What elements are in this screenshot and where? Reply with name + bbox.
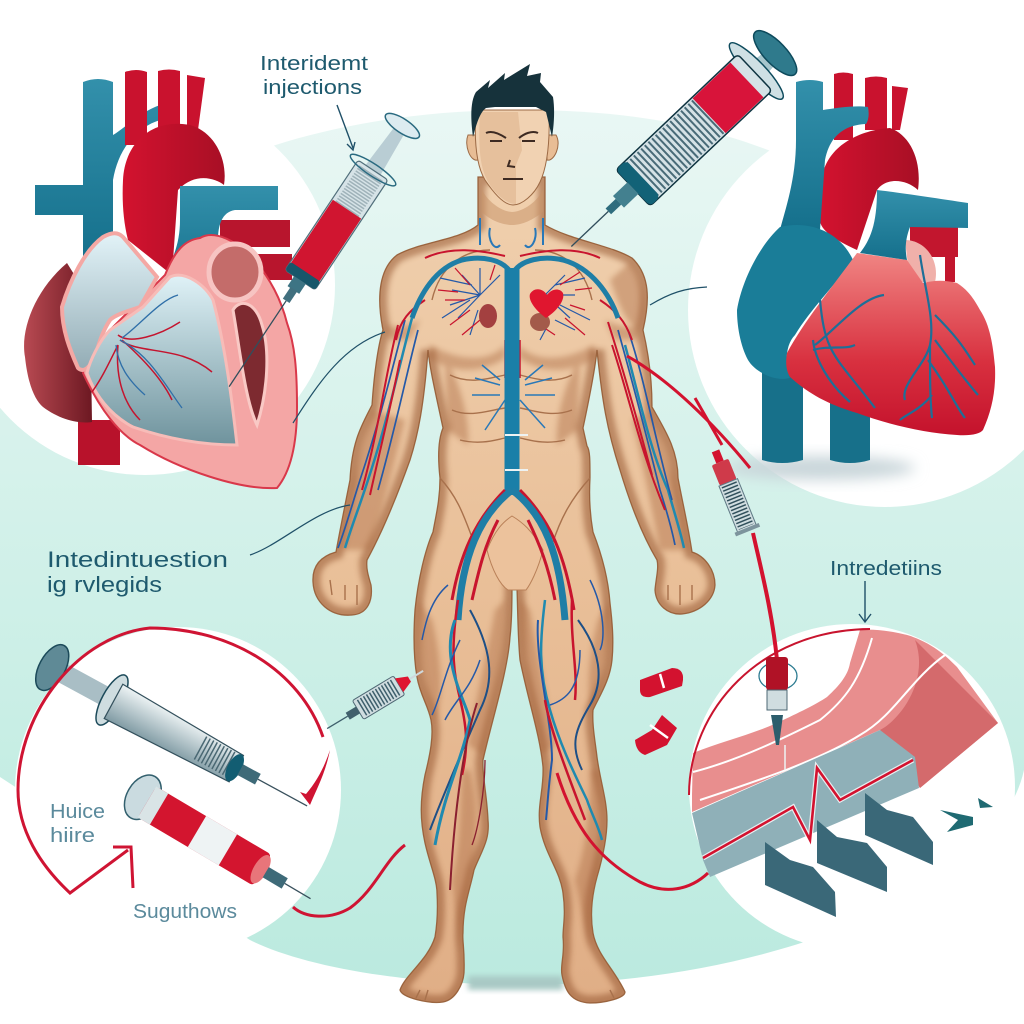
lung trees [438,265,592,430]
heart: cross-section top left [24,70,297,488]
label: left middle line two: ig rvlegids [47,572,162,597]
main chamber [87,275,237,445]
ground shadow [468,976,563,990]
label: hiire: hiire [50,825,95,847]
panel: bottom left circle [15,627,341,953]
panel: top left circle [0,95,335,475]
tube: leg to bottom right [557,773,708,889]
groin bifurcation red [452,490,574,610]
band lines [693,638,945,800]
curve to thigh [293,845,405,916]
syringe: top right [545,18,809,274]
valve ring [209,244,261,300]
upper red vessels [396,250,632,340]
label: suguthows: Suguthows [133,901,237,923]
right pec dark spot [530,313,550,331]
hair [471,64,554,137]
heart: exterior top right [725,72,995,480]
grey block [692,730,919,877]
right leg vessels [538,580,603,840]
heart vessels [813,255,978,420]
syringe: bottom left lower [117,768,324,918]
muscle lines [330,250,692,1000]
panel: bottom right circle [689,624,1015,950]
ears [467,135,558,160]
connector lines [250,287,707,555]
dark block two [817,820,887,892]
pills [635,668,683,755]
red arc: bottom right circle [689,629,870,795]
dark block three [865,793,933,865]
arrow: lower right [859,581,871,622]
groin bifurcation blue [458,490,565,620]
left leg vessels [422,585,489,890]
limb shading [340,262,690,950]
body [313,177,715,1003]
face shade [479,112,522,204]
human figure [313,64,715,1003]
syringe: top left [207,105,429,402]
pink band [692,630,998,812]
body inner shadow [313,177,715,1003]
crotch [487,516,543,590]
neck shadow [482,190,543,225]
label: left middle: Intedintuestion [47,547,228,572]
label: huice: Huice [50,801,105,823]
label: injections: Interidemt [260,53,369,75]
central trunk thick [504,268,520,495]
main heart body [786,253,995,435]
syringe: small thigh [321,661,429,738]
left atrium pane [62,233,157,370]
ecg line halo [703,760,913,858]
tube: to lower syringe [753,533,777,660]
panel: tissue cross-section [692,630,998,917]
label: right: Intredetiins [830,558,942,580]
ecg line [703,760,913,858]
darker muscle [880,640,998,788]
syringe: bottom left upper [27,637,320,831]
panel: top right circle [688,113,1024,507]
syringe: lower right vertical [759,657,797,770]
check mark [300,750,330,805]
tube: arm curve [627,356,750,468]
pec dark spot [479,304,497,328]
syringe: small right arm [703,446,760,536]
clips [505,435,528,470]
dark block one [765,842,836,917]
arrow: to syringe [337,105,355,150]
label: injections line two: injections [263,77,362,99]
head [475,110,549,205]
brows, eyes, nose, mouth [486,132,538,179]
arm vessels [345,318,684,548]
central trunk branches [412,258,618,318]
arc arrow [18,628,323,893]
right chamber slit [233,303,267,425]
heart icon on chest [530,289,563,318]
arrows: bottom left red lines [18,628,405,916]
ventricle wall [83,235,297,488]
small dark arrows [940,798,993,832]
neck vessels [480,218,543,247]
